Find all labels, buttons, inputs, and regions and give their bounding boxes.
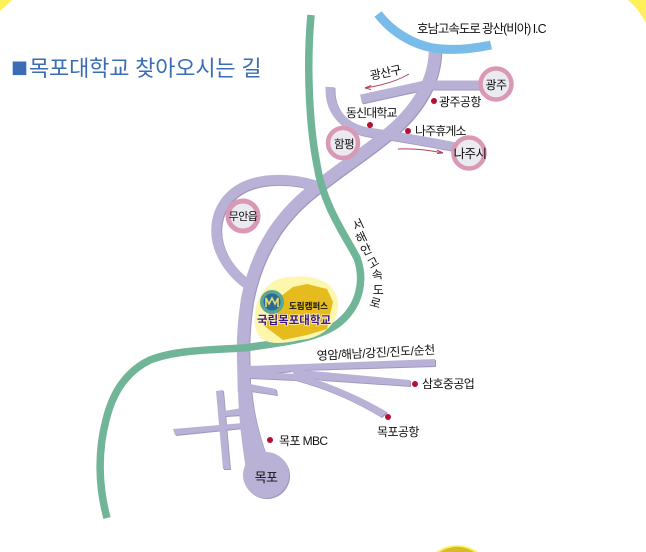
label: Mokpo airport xyxy=(377,414,419,439)
city marker: Muan xyxy=(228,201,258,231)
road: Gwangju branch xyxy=(361,85,490,99)
road: side streets xyxy=(173,390,243,469)
campus highlight and logo xyxy=(255,276,338,343)
label: Gwangsan-gu: 광산구 xyxy=(369,63,403,83)
label: Seohaean expressway: 도 xyxy=(373,283,384,297)
road network xyxy=(173,52,490,498)
city marker: Muan: 무안읍 xyxy=(229,210,258,223)
label: Seohaean expressway xyxy=(350,216,384,311)
road: short stub xyxy=(250,384,277,395)
city marker: Gwangju xyxy=(480,68,512,100)
road: Samho branch xyxy=(290,369,410,386)
logo xyxy=(260,290,284,314)
city marker: Gwangju: 광주 xyxy=(486,78,507,92)
label: Seohaean expressway: 서 xyxy=(350,216,366,234)
label: Seohaean expressway: 해 xyxy=(353,229,369,247)
title: 목포대학교 찾아오시는 길 xyxy=(29,56,261,81)
city label: Mokpo: 목포 xyxy=(255,470,278,485)
city marker: Hampyeong: 함평 xyxy=(334,138,354,151)
label: Dongshin University: 동신대학교 xyxy=(346,106,398,120)
decorative circle: bottom xyxy=(436,545,478,552)
road: Muan loop xyxy=(216,180,320,286)
arrow: toward Gwangsan xyxy=(365,74,409,90)
road: Mokpo terminus xyxy=(243,452,289,498)
label: Mokpo MBC: 목포 MBC xyxy=(279,434,328,448)
label: Seohaean expressway: 속 xyxy=(371,267,384,283)
label: Gwangju airport: 광주공항 xyxy=(439,95,481,109)
expressway: Honam xyxy=(378,14,491,49)
decorative corner: top left xyxy=(0,0,12,11)
label: Honam IC: 호남고속도로 광산(비아) I.C xyxy=(417,22,547,36)
road: Hampyeong curve xyxy=(330,87,456,147)
city marker: Hampyeong xyxy=(328,128,358,158)
road: Yeongam branch xyxy=(248,359,435,376)
label: Naju rest area: 나주휴게소 xyxy=(415,124,467,138)
label: Seohaean expressway: 고 xyxy=(365,254,381,272)
label: Yeongam routes: 영암/해남/강진/진도/순천 xyxy=(316,342,435,363)
road: main highway xyxy=(243,52,435,392)
label: Dongshin University xyxy=(346,106,398,128)
road: lower trunk xyxy=(238,385,268,470)
expressway: Seohaean xyxy=(100,15,361,518)
campus label: 도림캠퍼스 xyxy=(289,301,328,311)
decorative corner: top right xyxy=(628,0,646,23)
title: ■ xyxy=(11,55,28,80)
arrow: toward Naju xyxy=(398,149,443,154)
label: Seohaean expressway: 안 xyxy=(358,241,374,259)
road: airport branch xyxy=(250,372,387,417)
label: Samho: 삼호중공업 xyxy=(422,377,474,391)
university name: 국립목포대학교 xyxy=(257,313,331,327)
city marker: Naju xyxy=(454,138,486,168)
label: Seohaean expressway: 로 xyxy=(368,295,382,311)
label: Mokpo airport: 목포공항 xyxy=(377,425,419,439)
city marker: Naju: 나주시 xyxy=(454,147,486,161)
